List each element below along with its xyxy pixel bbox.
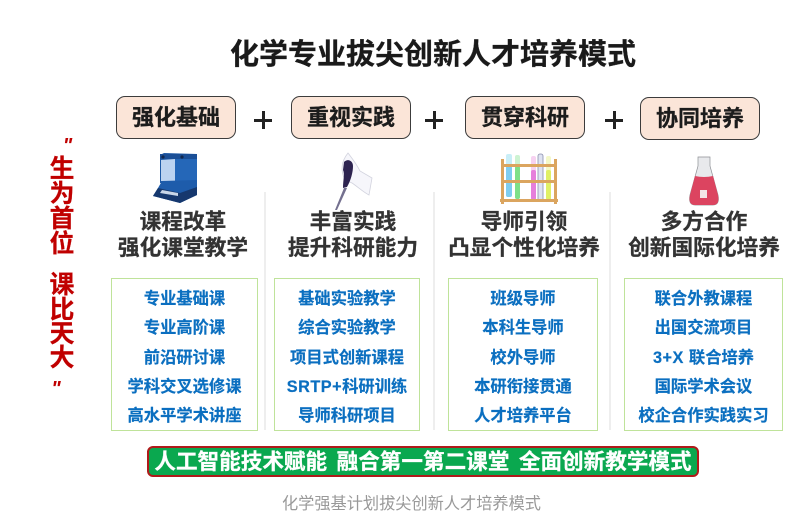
list panel: practice: SRTP+科研训练: [287, 378, 407, 396]
list panel: practice: [274, 278, 420, 431]
heading: rich practice: 提升科研能力: [288, 235, 418, 260]
vertical slogan: ": [63, 135, 72, 157]
heading: mentor guidance: 导师引领: [481, 209, 567, 234]
heading: rich practice: [288, 209, 418, 260]
list panel: courses: 前沿研讨课: [144, 349, 225, 367]
list panel: courses: 高水平学术讲座: [128, 407, 241, 425]
list panel: courses: [111, 278, 258, 431]
list panel: practice: 基础实验教学: [298, 290, 396, 308]
vertical slogan: 大: [49, 344, 74, 372]
badge: collaborative training: [640, 97, 760, 140]
heading: course reform: 课程改革: [140, 209, 226, 234]
plus sign 3: [605, 111, 623, 129]
vertical slogan: [49, 135, 74, 400]
icon: erlenmeyer flask: [689, 156, 719, 206]
list panel: practice: 项目式创新课程: [290, 349, 404, 367]
badge: strengthen foundation: [116, 96, 236, 139]
list panel: cooperation: [624, 278, 783, 431]
list panel: cooperation: 联合外教课程: [655, 290, 752, 308]
list panel: cooperation: 3+X 联合培养: [653, 349, 754, 367]
list panel: mentors: [448, 278, 598, 431]
list panel: mentors: 班级导师: [490, 290, 556, 308]
list panel: practice: 导师科研项目: [298, 407, 396, 425]
vertical slogan: 生: [49, 155, 74, 183]
list panel: cooperation: 出国交流项目: [655, 319, 752, 337]
badge: research throughout: [465, 96, 585, 139]
list panel: cooperation: 国际学术会议: [655, 378, 752, 396]
vertical slogan: 天: [49, 320, 74, 348]
plus sign 1: [254, 111, 272, 129]
heading: course reform: 强化课堂教学: [118, 235, 248, 260]
badge: collaborative training: 协同培养: [656, 106, 744, 131]
list panel: mentors: 人才培养平台: [474, 407, 572, 425]
list panel: mentors: 本研衔接贯通: [474, 378, 572, 396]
caption: 化学强基计划拔尖创新人才培养模式: [282, 495, 541, 513]
heading: multi-party cooperation: 多方合作: [661, 209, 747, 234]
list panel: cooperation: 校企合作实践实习: [638, 407, 769, 425]
icon: test tube rack: [500, 154, 558, 204]
badge: strengthen foundation: 强化基础: [132, 105, 220, 130]
badge: value practice: 重视实践: [307, 105, 395, 130]
vertical slogan: 为: [49, 180, 74, 208]
list panel: courses: 专业高阶课: [144, 319, 225, 337]
list panel: courses: 专业基础课: [144, 290, 225, 308]
badge: research throughout: 贯穿科研: [481, 105, 569, 130]
icon: analytical balance: [153, 153, 197, 203]
heading: mentor guidance: [448, 209, 600, 260]
heading: course reform: [118, 209, 248, 260]
bottom banner: 人工智能技术赋能 融合第一第二课堂 全面创新教学模式: [154, 449, 692, 474]
vertical slogan: 首: [49, 205, 74, 233]
icon: pipette in gloved hand: [335, 152, 372, 210]
heading: multi-party cooperation: 创新国际化培养: [628, 235, 780, 260]
list panel: courses: 学科交叉选修课: [128, 378, 241, 396]
divider lines: [264, 192, 611, 430]
vertical slogan: ": [51, 378, 61, 400]
heading: multi-party cooperation: [628, 209, 780, 260]
title: 化学专业拔尖创新人才培养模式: [230, 39, 636, 71]
vertical slogan: 比: [49, 296, 74, 324]
list panel: mentors: 本科生导师: [482, 319, 564, 337]
heading: rich practice: 丰富实践: [310, 209, 396, 234]
vertical slogan: 位: [49, 230, 74, 258]
plus sign 2: [425, 111, 443, 129]
list panel: practice: 综合实验教学: [298, 319, 396, 337]
badge: value practice: [291, 96, 411, 139]
heading: mentor guidance: 凸显个性化培养: [448, 235, 600, 260]
list panel: mentors: 校外导师: [490, 349, 556, 367]
vertical slogan: 课: [49, 271, 74, 299]
